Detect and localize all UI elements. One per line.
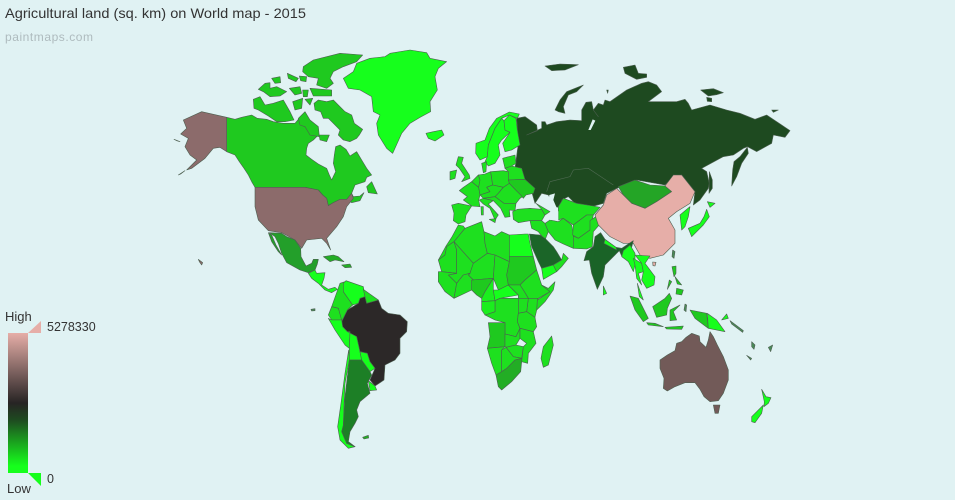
- region: South Asia, Southeast Asia and Oceania: [584, 233, 773, 423]
- country: Thailand: [633, 258, 643, 285]
- watermark: paintmaps.com: paintmaps.com: [5, 30, 93, 44]
- country: Cuba: [323, 255, 344, 262]
- country: Borneo: [653, 293, 672, 317]
- country: Argentina: [342, 360, 372, 447]
- country: Morocco: [438, 225, 465, 260]
- country: Turkey: [513, 208, 545, 223]
- region: East Asia: [595, 175, 715, 258]
- legend: [5, 309, 96, 496]
- region: Russia and East Asia: [515, 64, 790, 210]
- country: Colombia: [332, 282, 353, 322]
- country: Iraq and Syria: [530, 221, 548, 240]
- country: Central Asia: [558, 198, 600, 225]
- legend low marker: [28, 473, 41, 486]
- legend label: High: High: [5, 309, 32, 324]
- country: Guianas: [363, 289, 378, 303]
- country: Libya: [484, 232, 509, 262]
- country: Mexico: [268, 233, 318, 273]
- islands: Maluku: [684, 304, 687, 312]
- region: Europe and West Asia: [450, 112, 601, 249]
- Kazakhstan border: [547, 168, 613, 192]
- island: New Britain: [722, 314, 728, 320]
- country: Chile: [338, 350, 355, 448]
- country: Afghanistan: [573, 215, 593, 238]
- country: Botswana: [502, 347, 522, 372]
- country: South Sudan: [508, 285, 528, 298]
- country: Brazil: [342, 297, 407, 386]
- legend colour bar: [8, 333, 28, 473]
- islands: Fiji: [768, 345, 773, 352]
- country: Poland: [491, 171, 509, 187]
- country: USA: [174, 112, 353, 265]
- country: Central African Republic: [493, 285, 518, 301]
- country: Taiwan: [672, 250, 675, 258]
- country: Falkland Islands: [363, 435, 369, 439]
- islands: Lesser Sunda: [665, 326, 683, 329]
- country: Venezuela: [343, 281, 365, 305]
- country: Mali: [448, 242, 473, 283]
- country: Australia: [660, 332, 728, 413]
- country: Finland: [503, 115, 520, 152]
- country: Bolivia: [347, 332, 362, 360]
- country: Paraguay: [360, 352, 375, 372]
- island: Sardinia: [481, 207, 483, 215]
- legend label: Low: Low: [7, 481, 31, 496]
- country: Central Europe: [480, 185, 503, 198]
- gulf of Ob: [588, 119, 595, 130]
- country: Mozambique: [520, 328, 536, 363]
- country: Ecuador: [328, 307, 342, 320]
- legend value: min: 0: [47, 472, 54, 486]
- country: Mauritania: [438, 242, 457, 273]
- country: Uganda: [518, 298, 528, 313]
- country: Malaysia: [637, 283, 643, 300]
- title: Agricultural land (sq. km) on World map - 2015: [5, 5, 306, 21]
- country: Benelux: [472, 175, 480, 187]
- country: Tanzania: [517, 312, 537, 332]
- country: Russia and Kazakhstan: [515, 64, 790, 210]
- country: Denmark: [482, 162, 487, 173]
- country: Somalia: [537, 282, 555, 310]
- country: Egypt: [509, 234, 533, 257]
- country: India: [584, 233, 633, 289]
- country: Balkans: [483, 197, 516, 217]
- islands: Vanuatu: [752, 342, 755, 349]
- country: Congo and Gabon: [482, 301, 495, 315]
- country: Algeria: [454, 222, 487, 263]
- country: Oman: [553, 253, 568, 272]
- country: China: [595, 175, 695, 258]
- island: Sicily: [489, 219, 496, 223]
- country: Nepal: [604, 239, 617, 250]
- country: Saudi Arabia: [529, 234, 562, 268]
- country: Japan: [688, 202, 715, 237]
- country: Java: [647, 323, 663, 327]
- region: North America: [174, 50, 447, 273]
- country: Ghana and neighbours: [454, 273, 473, 298]
- country: Belarus: [505, 166, 525, 180]
- country: Chad: [493, 255, 509, 290]
- legend high marker: [28, 321, 41, 333]
- country: Sulawesi: [670, 305, 680, 321]
- country: Ireland: [450, 170, 457, 180]
- island: Hainan: [653, 262, 656, 266]
- country: Nigeria: [472, 278, 493, 298]
- country: Cameroon: [482, 278, 495, 302]
- country: Papua New Guinea: [707, 313, 725, 332]
- country: Sudan: [507, 257, 537, 285]
- country: Italy: [479, 198, 498, 220]
- country: Senegal and Guinea: [438, 272, 457, 298]
- country: Central America: [308, 270, 337, 293]
- country: Iceland: [426, 130, 444, 141]
- country: Myanmar: [622, 245, 635, 272]
- country: Sri Lanka: [603, 286, 607, 295]
- country: Sumatra: [630, 296, 648, 322]
- islands: Galapagos: [311, 309, 315, 311]
- country: Korea: [680, 207, 690, 230]
- country: New Zealand: [752, 389, 771, 423]
- country: South Africa: [496, 358, 522, 390]
- country: Mongolia: [618, 180, 672, 208]
- region: South America: [308, 270, 407, 448]
- country: Namibia: [487, 347, 505, 375]
- country: Uruguay: [368, 381, 377, 391]
- country: Iran: [545, 218, 573, 248]
- legend value: max: 5278330: [47, 320, 96, 334]
- country: Philippines: [667, 266, 683, 295]
- country: Baltics: [503, 155, 516, 168]
- country: Germany: [478, 172, 493, 195]
- country: Kenya: [527, 298, 538, 317]
- country: Papua: [690, 310, 708, 328]
- country: Zambia: [505, 328, 520, 347]
- country: Ukraine: [508, 179, 535, 198]
- country: Ethiopia: [520, 270, 550, 298]
- country: Greenland: [343, 50, 447, 153]
- country: France: [459, 182, 480, 207]
- country: United Kingdom: [456, 157, 470, 182]
- country: DR Congo: [485, 298, 520, 337]
- country: Canada: [227, 53, 377, 206]
- country: Pakistan: [573, 215, 601, 249]
- country: Hispaniola: [342, 264, 352, 268]
- country: Peru: [328, 318, 350, 348]
- country: Norway: [476, 112, 519, 160]
- country: Vietnam and neighbours: [635, 255, 655, 288]
- country: Zimbabwe: [506, 345, 523, 358]
- region: Africa and Arabia: [438, 222, 568, 390]
- islands: New Caledonia: [747, 355, 752, 360]
- country: Sweden: [485, 118, 510, 166]
- country: Angola: [487, 323, 505, 348]
- country: Caucasus: [536, 203, 550, 215]
- country: Romania and Hungary: [495, 183, 523, 203]
- country: Niger: [468, 253, 495, 280]
- sea: Caspian: [548, 193, 558, 220]
- country: Spain and Portugal: [452, 203, 472, 224]
- islands: Solomon: [730, 321, 743, 332]
- country: Madagascar: [541, 336, 553, 367]
- country: Yemen: [542, 265, 557, 279]
